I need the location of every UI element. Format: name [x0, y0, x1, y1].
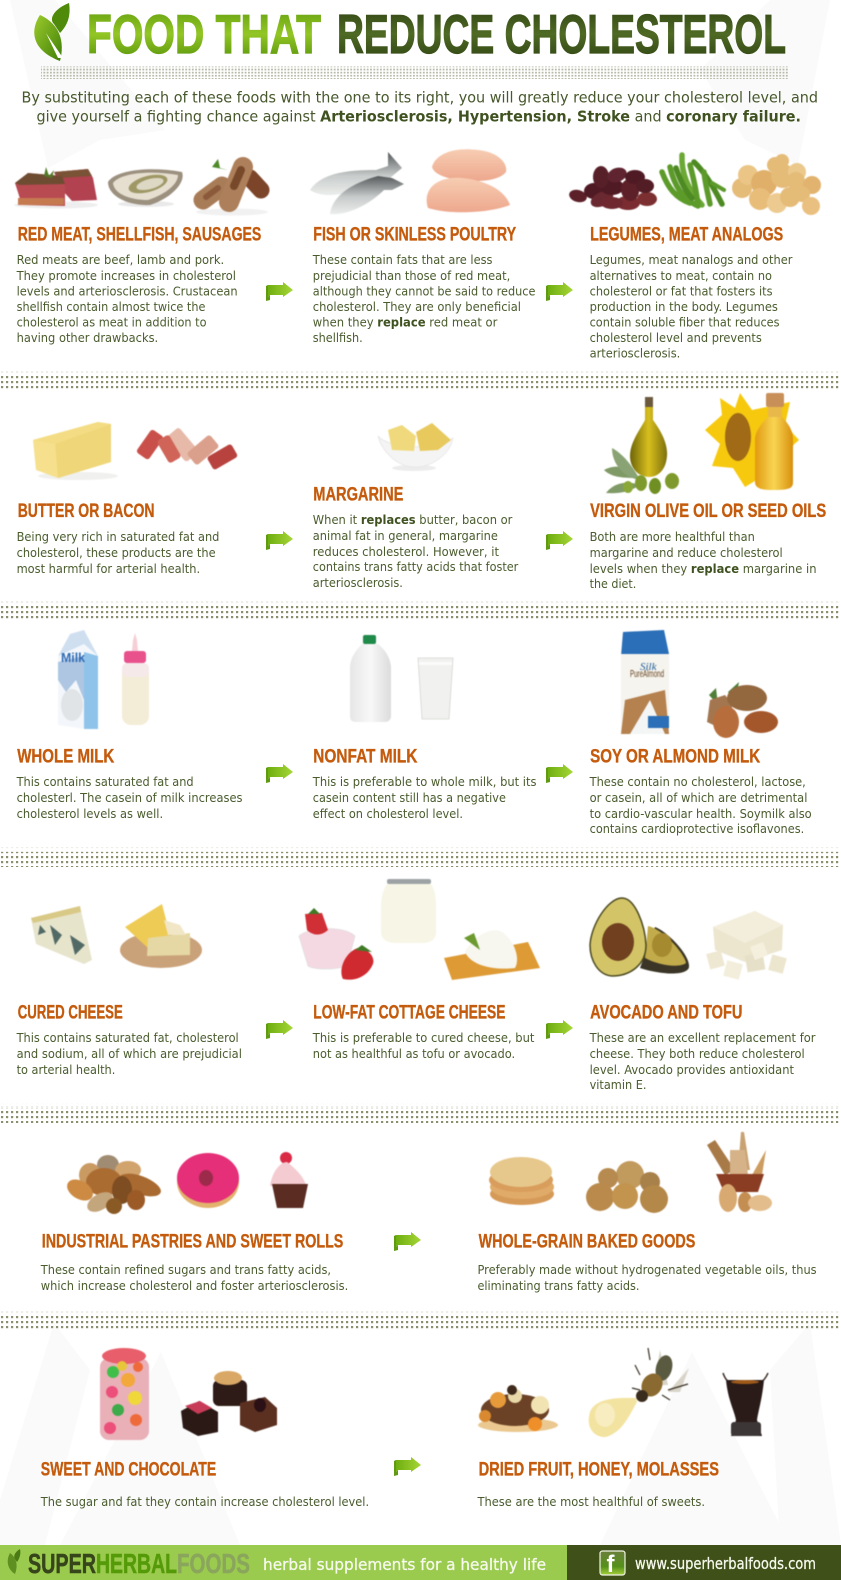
text block: This contains saturated fat and — [16, 775, 194, 789]
icon: almond milk carton: PureAlmond — [630, 669, 664, 680]
icon: oyster — [108, 169, 183, 207]
intro text: give yourself a fighting chance against Arteriosclerosis, Hypertension, Stroke and coronary failure. — [36, 108, 801, 126]
arrow — [266, 764, 293, 783]
text block: the diet. — [590, 577, 636, 591]
text block: arteriosclerosis. — [313, 576, 403, 590]
logo wordmark: SUPER — [28, 1548, 96, 1579]
text block — [312, 775, 536, 821]
text block: contain soluble fiber that reduces — [590, 316, 780, 330]
icon: chocolates — [181, 1371, 277, 1436]
text block: These contain no cholesterol, lactose, — [589, 775, 806, 789]
text block: The sugar and fat they contain increase cholesterol level. — [40, 1495, 369, 1509]
text block: vitamin E. — [590, 1078, 646, 1092]
text block: prejudicial than those of red meat, — [313, 269, 510, 283]
text block: alternatives to meat, contain no — [590, 269, 772, 283]
icon: butter — [33, 422, 118, 480]
tagline: herbal supplements for a healthy life — [263, 1555, 546, 1574]
text block: contains trans fatty acids that foster — [313, 560, 518, 574]
text block: cheese. They both reduce cholesterol — [590, 1047, 805, 1061]
icon: cottage cheese on board — [444, 930, 540, 980]
panel: low-fat cottage cheese — [299, 879, 540, 1061]
heading: MARGARINE — [313, 484, 403, 506]
text block: cholesterol level and prevents — [590, 331, 762, 345]
text block: margarine and reduce cholesterol — [590, 546, 783, 560]
icon: almond milk carton — [621, 630, 669, 734]
icon: seed oil bottle — [755, 393, 793, 490]
text block: most harmful for arterial health. — [17, 562, 200, 576]
panel: virgin olive oil or seed oils — [590, 393, 826, 591]
panel: avocado and tofu — [589, 898, 816, 1092]
heading: LOW-FAT COTTAGE CHEESE — [313, 1001, 505, 1023]
text block: cholesterol or fat that fosters its — [590, 284, 772, 298]
icon: candy jar — [100, 1348, 149, 1440]
heading: AVOCADO AND TOFU — [590, 1001, 742, 1023]
icon: bee — [632, 1348, 689, 1402]
heading: NONFAT MILK — [313, 746, 417, 768]
text block: when they replace red meat or — [313, 316, 497, 330]
text block: production in the body. Legumes — [590, 300, 778, 314]
icon: bread basket — [707, 1132, 772, 1212]
text block — [312, 1031, 535, 1061]
panel: margarine — [313, 423, 518, 590]
panel: legumes, meat analogs — [568, 154, 821, 360]
text block: This is preferable to whole milk, but its — [312, 775, 536, 789]
panel: red meat, shellfish, sausages — [14, 159, 268, 345]
text block: cholesterl. The casein of milk increases — [17, 791, 242, 805]
logo wordmark: FOODS — [177, 1548, 250, 1579]
text block: level. Avocado provides antioxidant — [590, 1063, 794, 1077]
text block: having other drawbacks. — [17, 331, 158, 345]
icon: bacon — [136, 427, 238, 470]
text block: animal fat in general, margarine — [313, 529, 498, 543]
icon: tofu — [706, 911, 787, 980]
icon: green beans — [662, 155, 724, 206]
text block: not as healthful as tofu or avocado. — [313, 1047, 515, 1061]
panel: sweet and chocolate — [40, 1348, 369, 1509]
logo wordmark: HERBAL — [96, 1548, 177, 1579]
icon: margarine bowl — [378, 423, 453, 471]
arrow — [546, 1020, 573, 1039]
title: FOOD THAT — [87, 3, 321, 65]
heading: DRIED FRUIT, HONEY, MOLASSES — [479, 1458, 719, 1480]
text block: casein content still has a negative — [313, 791, 506, 805]
panel: whole milk — [16, 630, 243, 821]
icon: baby bottle — [122, 633, 149, 725]
intro text — [22, 88, 818, 126]
icon: pastries — [63, 1155, 164, 1216]
panel: fish or skinless poultry — [310, 149, 535, 345]
icon: dried fruit — [478, 1385, 558, 1432]
arrow — [394, 1457, 421, 1476]
icon: crackers — [489, 1157, 554, 1205]
icon: milk carton — [58, 630, 98, 729]
text block: These are an excellent replacement for — [589, 1031, 816, 1045]
text block — [589, 775, 812, 836]
icon: milk carton: Milk — [61, 650, 86, 665]
logo wordmark — [28, 1548, 250, 1579]
text block: cholesterol, these products are the — [17, 546, 216, 560]
intro text: By substituting each of these foods with the one to its right, you will greatly reduce your cholesterol level, and — [22, 88, 818, 106]
heading: RED MEAT, SHELLFISH, SAUSAGES — [18, 224, 261, 246]
icon: strawberry yogurt — [299, 908, 373, 980]
icon: milk jug — [350, 635, 391, 722]
icon: avocado — [590, 898, 689, 976]
icon: olives — [604, 448, 679, 494]
icon: olive oil bottle — [630, 397, 667, 477]
icon: footer leaf — [8, 1549, 20, 1574]
panel: industrial pastries and sweet rolls — [40, 1152, 348, 1293]
icon: glass of milk — [418, 658, 453, 719]
arrow — [266, 531, 293, 550]
icon: steak — [14, 167, 98, 208]
text block: shellfish. — [313, 331, 363, 345]
text block: This contains saturated fat, cholesterol — [16, 1031, 239, 1045]
text block: to cardio-vascular health. Soymilk also — [590, 807, 812, 821]
icon: sunflower — [705, 393, 799, 487]
icon: honey drop — [589, 1398, 637, 1437]
text block: effect on cholesterol level. — [313, 807, 463, 821]
text block: Both are more healthful than — [590, 530, 755, 544]
icon: soy chunks — [732, 154, 821, 215]
header — [22, 3, 818, 126]
heading: WHOLE MILK — [17, 746, 114, 768]
text block: reduces cholesterol. However, it — [313, 545, 499, 559]
icon: pink donut — [177, 1153, 239, 1208]
text block — [40, 1263, 348, 1293]
text block: Preferably made without hydrogenated vegetable oils, thus — [478, 1263, 817, 1277]
text block: These contain refined sugars and trans fatty acids, — [40, 1263, 331, 1277]
panel: cured cheese — [16, 904, 242, 1077]
panel: soy or almond milk — [589, 630, 812, 836]
text block — [590, 253, 792, 360]
text block — [17, 530, 219, 576]
heading: INDUSTRIAL PASTRIES AND SWEET ROLLS — [42, 1230, 343, 1252]
panel: butter or bacon — [17, 422, 238, 576]
text block — [590, 530, 816, 591]
footer — [0, 1545, 841, 1580]
icon: cupcake — [270, 1152, 308, 1208]
heading: FISH OR SKINLESS POULTRY — [313, 224, 516, 246]
text block: When it replaces butter, bacon or — [313, 513, 512, 527]
text block — [589, 1031, 816, 1092]
text block: although they cannot be said to reduce — [313, 284, 535, 298]
icon: logo leaves — [34, 3, 70, 61]
panel: dried fruit, honey, molasses — [477, 1348, 768, 1509]
icon: molasses glass — [723, 1373, 768, 1436]
text block — [16, 253, 238, 345]
icon: almond milk carton: Silk — [640, 661, 658, 673]
text block: cholesterol. They are only beneficial — [313, 300, 521, 314]
heading: SWEET AND CHOCOLATE — [41, 1458, 216, 1480]
icon: sausages — [196, 159, 268, 216]
text block: contains cardioprotective isoflavones. — [590, 822, 804, 836]
icon: blue cheese — [31, 906, 92, 964]
text block: levels and arteriosclerosis. Crustacean — [17, 284, 238, 298]
text block — [313, 513, 518, 590]
text block: Legumes, meat nanalogs and other — [590, 253, 792, 267]
text block: Red meats are beef, lamb and pork. — [17, 253, 224, 267]
text block — [16, 1031, 242, 1077]
title — [87, 3, 786, 65]
panel: whole-grain baked goods — [478, 1132, 817, 1293]
icon: chicken breast — [427, 149, 510, 212]
text block: cholesterol levels as well. — [17, 807, 163, 821]
text block — [16, 775, 243, 821]
text block: to arterial health. — [17, 1063, 115, 1077]
icon: kidney beans — [568, 165, 657, 210]
icon: facebook — [600, 1551, 625, 1578]
icon: buns — [586, 1161, 668, 1213]
text block: This is preferable to cured cheese, but — [312, 1031, 535, 1045]
text block: Being very rich in saturated fat and — [17, 530, 219, 544]
arrow — [546, 531, 573, 550]
heading: SOY OR ALMOND MILK — [590, 746, 760, 768]
heading: BUTTER OR BACON — [18, 500, 155, 522]
icon: fish — [310, 152, 404, 214]
panel: nonfat milk — [312, 635, 536, 821]
text block: eliminating trans fatty acids. — [478, 1279, 640, 1293]
arrow — [546, 764, 573, 783]
icon: cheese board — [120, 904, 202, 968]
text block: They promote increases in cholesterol — [16, 269, 236, 283]
heading: WHOLE-GRAIN BAKED GOODS — [479, 1230, 695, 1252]
icon: yogurt jar — [381, 879, 436, 943]
text block — [312, 253, 535, 345]
arrow — [394, 1232, 421, 1251]
heading: CURED CHEESE — [18, 1001, 123, 1023]
text block: shellfish contain almost twice the — [17, 300, 205, 314]
icon: facebook: f — [606, 1551, 616, 1578]
text block: levels when they replace margarine in — [590, 562, 816, 576]
text block: and sodium, all of which are prejudicial — [17, 1047, 242, 1061]
arrow — [266, 282, 293, 301]
arrow — [546, 282, 573, 301]
text block — [478, 1263, 817, 1293]
icon: almonds — [707, 682, 778, 738]
arrow — [266, 1020, 293, 1039]
text block: which increase cholesterol and foster arteriosclerosis. — [41, 1279, 348, 1293]
text block: cholesterol as meat in addition to — [17, 316, 206, 330]
text block: These contain fats that are less — [312, 253, 492, 267]
text block: or casein, all of which are detrimental — [590, 791, 807, 805]
text block: arteriosclerosis. — [590, 346, 680, 360]
text block: These are the most healthful of sweets. — [477, 1495, 705, 1509]
